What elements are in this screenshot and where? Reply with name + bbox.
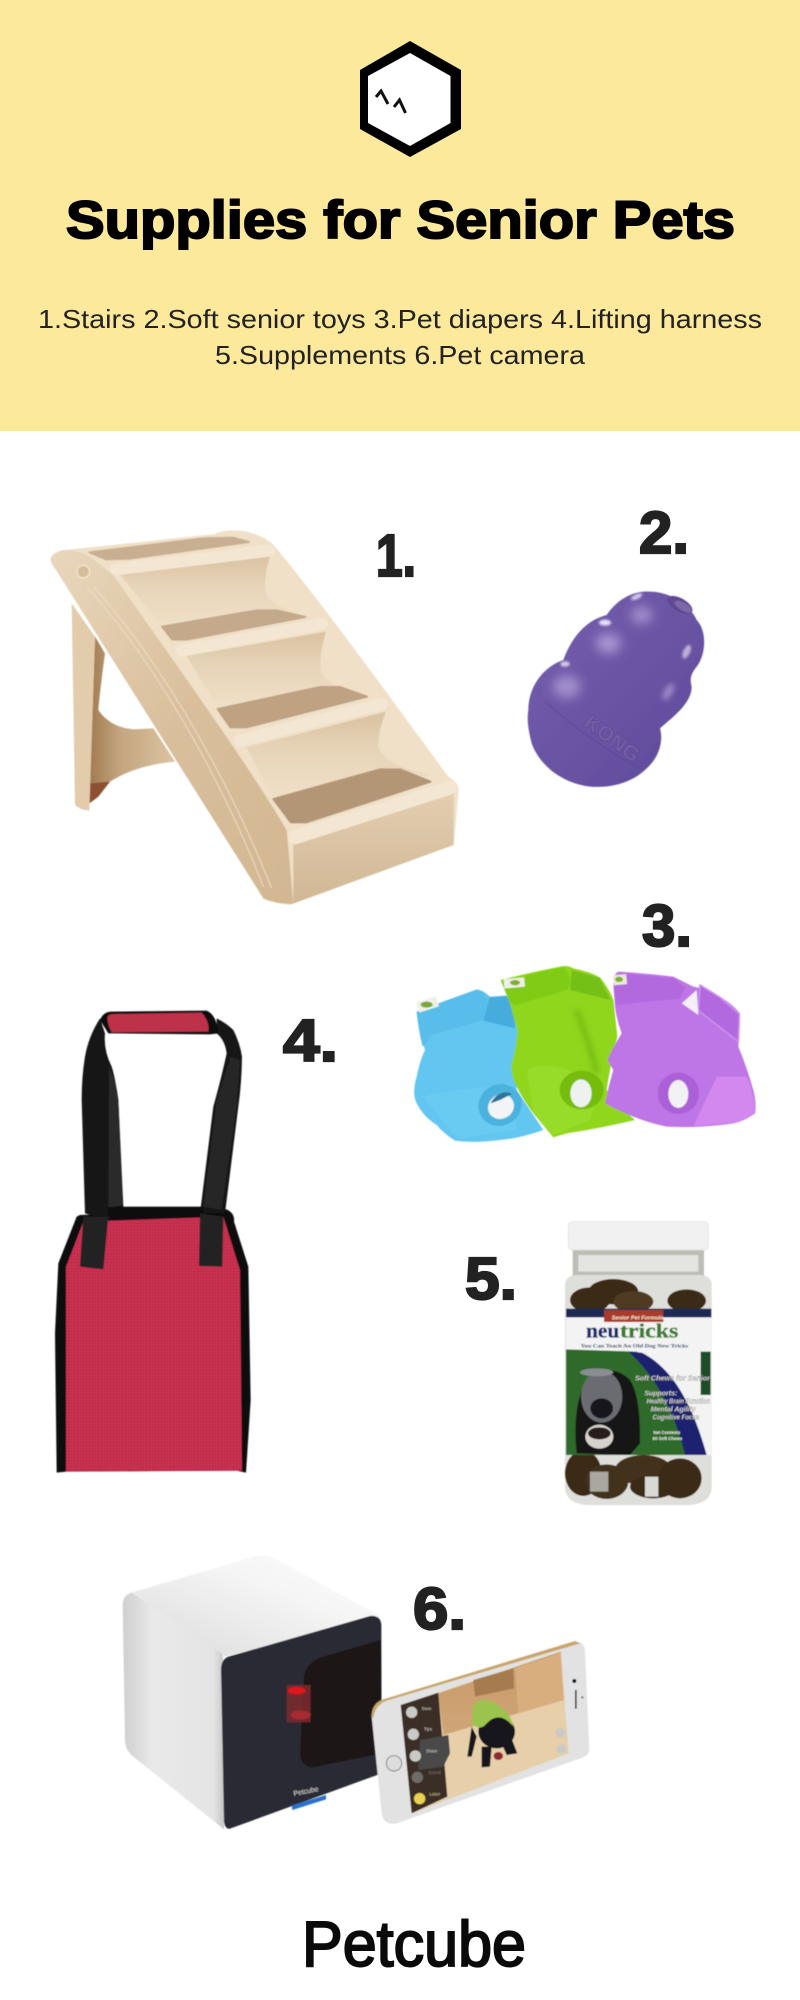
smartphone: Save <box>422 1706 432 1711</box>
Petcube footer logo: Petcube <box>302 1908 526 1980</box>
jar label: Senior Pet Formula <box>612 1316 664 1322</box>
item 2: purple Kong toy: KONG <box>580 711 644 767</box>
purple diaper <box>605 972 756 1127</box>
smartphone <box>372 1641 589 1824</box>
header banner <box>0 0 800 431</box>
title: Supplies for Senior Pets <box>66 191 735 250</box>
dog on screen <box>467 1700 517 1767</box>
item 5: supplements jar <box>565 1222 712 1505</box>
chews <box>565 1279 706 1499</box>
green diaper <box>501 966 635 1137</box>
jar label: Supports: <box>644 1390 677 1397</box>
jar label: neu <box>586 1321 619 1343</box>
camera cube: Petcube <box>293 1784 319 1798</box>
icon: Petcube hexagon logo <box>360 41 461 157</box>
smartphone: Laser <box>429 1791 441 1796</box>
jar lid <box>568 1222 708 1250</box>
item 1: pet stairs <box>51 530 459 905</box>
jar label: Healthy Brain Function <box>647 1398 710 1405</box>
number 3: 3. <box>642 893 692 959</box>
jar label: 60 Soft Chews <box>653 1436 683 1441</box>
smartphone: Share <box>426 1749 438 1754</box>
item 6: Petcube pet camera and phone <box>123 1555 589 1829</box>
jar label: Cognitive Focus <box>653 1414 699 1421</box>
step 1 <box>89 538 307 625</box>
harness straps <box>80 1018 242 1269</box>
jar label: Soft Chews for Senior <box>635 1376 711 1383</box>
step 3 <box>218 687 432 798</box>
item 4: lifting harness <box>55 1011 251 1473</box>
jar label: Mental Agility <box>651 1406 697 1413</box>
jar label: Net Contents <box>653 1430 681 1435</box>
step 4 <box>273 769 454 903</box>
jar label: You Can Teach An Old Dog New Tricks <box>581 1343 689 1349</box>
list of supplies: 1.Stairs 2.Soft senior toys 3.Pet diapers 4.Lifting harness <box>38 304 762 334</box>
harness panel <box>55 1209 251 1473</box>
dog photo <box>575 1368 640 1455</box>
list of supplies <box>38 304 762 370</box>
jar label: tricks <box>620 1321 679 1343</box>
number 1: 1. <box>376 523 416 589</box>
smartphone: Sound <box>428 1770 441 1775</box>
number 2: 2. <box>639 500 689 566</box>
number 5: 5. <box>465 1246 517 1312</box>
number 4: 4. <box>283 1008 338 1074</box>
jar label <box>566 1309 711 1455</box>
list of supplies: 5.Supplements 6.Pet camera <box>215 340 586 370</box>
camera cube <box>123 1555 382 1829</box>
item 3: pet diapers <box>414 966 756 1142</box>
item 2: purple Kong toy <box>528 591 704 787</box>
jar body <box>565 1250 712 1505</box>
step 2 <box>162 610 367 708</box>
stairs body <box>51 530 459 905</box>
smartphone: Tips <box>424 1727 432 1732</box>
number 6: 6. <box>413 1576 466 1642</box>
blue diaper <box>414 989 543 1142</box>
stairs rear leg <box>72 603 175 811</box>
harness handle <box>100 1011 218 1034</box>
